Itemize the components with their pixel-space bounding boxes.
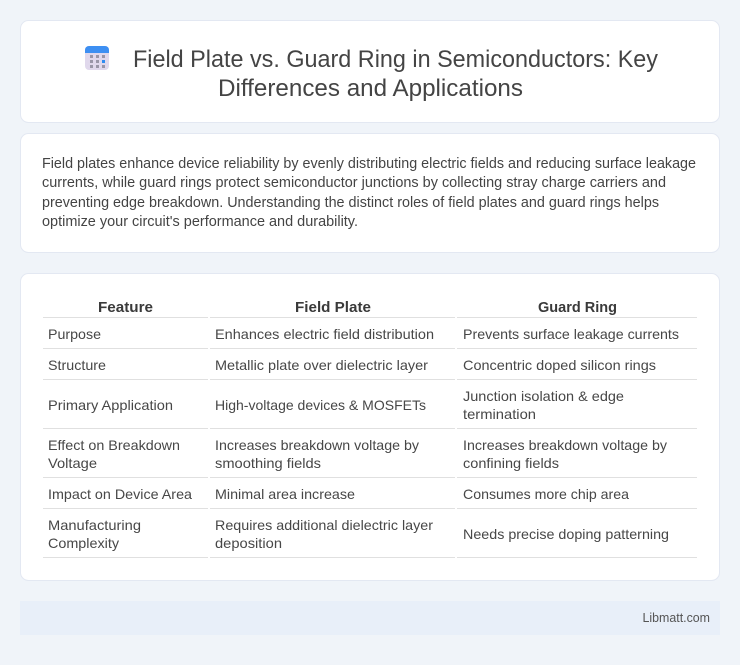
- title: [133, 47, 658, 102]
- table header: Feature: [98, 300, 153, 316]
- text block: introduction paragraph: optimize your circuit's performance and durability.: [42, 214, 358, 230]
- row: impact on device area: Consumes more chip area: [463, 486, 629, 502]
- row: manufacturing complexity: Requires additional dielectric layer: [215, 517, 433, 533]
- panel: comparison table: [20, 274, 720, 580]
- row: structure: Structure: [48, 357, 106, 373]
- row: manufacturing complexity: [48, 517, 669, 551]
- row: structure: [48, 357, 656, 373]
- text block: introduction paragraph: currents, while guard rings protect semiconductor junctions by collecting stray charge carriers and: [42, 175, 666, 191]
- title: Field Plate vs. Guard Ring in Semiconductors: Key: [133, 47, 658, 73]
- icon: calendar: [85, 46, 109, 70]
- row: effect on breakdown voltage: Increases breakdown voltage by: [215, 437, 419, 453]
- text block: introduction paragraph: preventing edge breakdown. Understanding the distinct roles of field plates and guard rings helps: [42, 195, 659, 211]
- row: purpose: [48, 326, 679, 342]
- panel: title card: [20, 20, 720, 122]
- text block: introduction paragraph: Field plates enhance device reliability by evenly distributing electric fields and reducing surface leakage: [42, 156, 696, 172]
- row: structure: Concentric doped silicon rings: [463, 357, 656, 373]
- footer text: Libmatt.com: [642, 611, 710, 625]
- panel: introduction: [20, 134, 720, 252]
- row: purpose: Purpose: [48, 326, 101, 342]
- row: primary application: High-voltage devices & MOSFETs: [215, 397, 426, 413]
- text block: introduction paragraph: [42, 156, 696, 230]
- row: purpose: Prevents surface leakage currents: [463, 326, 679, 342]
- row: primary application: [48, 388, 624, 422]
- row: effect on breakdown voltage: confining fields: [463, 455, 559, 471]
- row: primary application: termination: [463, 406, 536, 422]
- row: impact on device area: Impact on Device Area: [48, 486, 192, 502]
- row: primary application: Primary Application: [48, 397, 173, 413]
- title: Differences and Applications: [218, 76, 523, 102]
- row: impact on device area: Minimal area increase: [215, 486, 355, 502]
- row: manufacturing complexity: Complexity: [48, 535, 119, 551]
- row: effect on breakdown voltage: Increases breakdown voltage by: [463, 437, 667, 453]
- table header: [98, 300, 617, 316]
- row: purpose: Enhances electric field distribution: [215, 326, 434, 342]
- row: manufacturing complexity: deposition: [215, 535, 282, 551]
- row: effect on breakdown voltage: Effect on Breakdown: [48, 437, 180, 453]
- row: effect on breakdown voltage: [48, 437, 667, 471]
- footer: [20, 601, 720, 635]
- table header: Guard Ring: [538, 300, 617, 316]
- row: primary application: Junction isolation & edge: [463, 388, 624, 404]
- row: manufacturing complexity: Manufacturing: [48, 517, 141, 533]
- table header: Field Plate: [295, 300, 371, 316]
- row: effect on breakdown voltage: smoothing fields: [215, 455, 321, 471]
- row: impact on device area: [48, 486, 629, 502]
- row: effect on breakdown voltage: Voltage: [48, 455, 97, 471]
- row: manufacturing complexity: Needs precise doping patterning: [463, 526, 669, 542]
- row: structure: Metallic plate over dielectric layer: [215, 357, 428, 373]
